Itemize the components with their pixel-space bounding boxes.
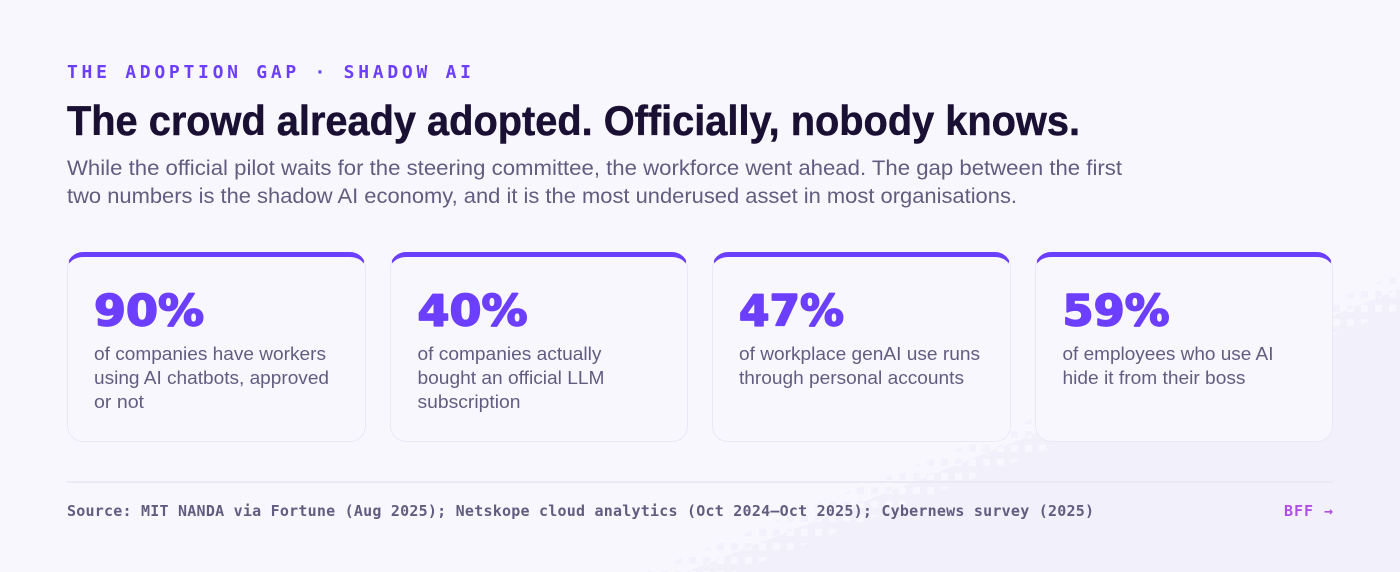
panel: stat card 47%: of workplace genAI use runs (739, 343, 980, 364)
panel: stat card 40%: subscription (417, 391, 520, 412)
panel: stat card 40% (390, 252, 688, 442)
panel: stat card 90%: of companies have workers (94, 343, 326, 364)
title: The crowd already adopted. Officially, nobody knows. (67, 97, 1080, 144)
subtitle text: While the official pilot waits for the steering committee, the workforce went ahead. The gap between the first (67, 157, 1122, 180)
panel: stat card 90%: 90% (94, 286, 204, 336)
eyebrow label: THE ADOPTION GAP · SHADOW AI (67, 62, 471, 83)
brand mark with arrow: BFF → (1284, 502, 1333, 520)
panel: stat card 40%: bought an official LLM (417, 367, 604, 388)
panel: stat card 90%: or not (94, 391, 144, 412)
panel: stat card 59%: 59% (1062, 286, 1169, 336)
panel: stat card 40%: of companies actually (417, 343, 602, 364)
panel: stat card 47% (712, 252, 1010, 442)
source note: Source: MIT NANDA via Fortune (Aug 2025); Netskope cloud analytics (Oct 2024—Oct 2025); Cybernews survey (2025) (67, 502, 1094, 520)
subtitle text (67, 157, 1122, 208)
panel: stat card 90%: using AI chatbots, approved (94, 367, 329, 388)
panel: stat card 40%: 40% (417, 286, 527, 336)
panel: stat card 47%: through personal accounts (739, 367, 964, 388)
panel: stat card 59% (1034, 252, 1333, 442)
panel: stat card 59%: of employees who use AI (1062, 343, 1273, 364)
panel: stat card 47%: 47% (739, 286, 844, 336)
panel: stat card 90% (67, 252, 366, 442)
subtitle text: two numbers is the shadow AI economy, and it is the most underused asset in most organisations. (67, 185, 1017, 208)
panel: stat card 59%: hide it from their boss (1062, 367, 1245, 388)
